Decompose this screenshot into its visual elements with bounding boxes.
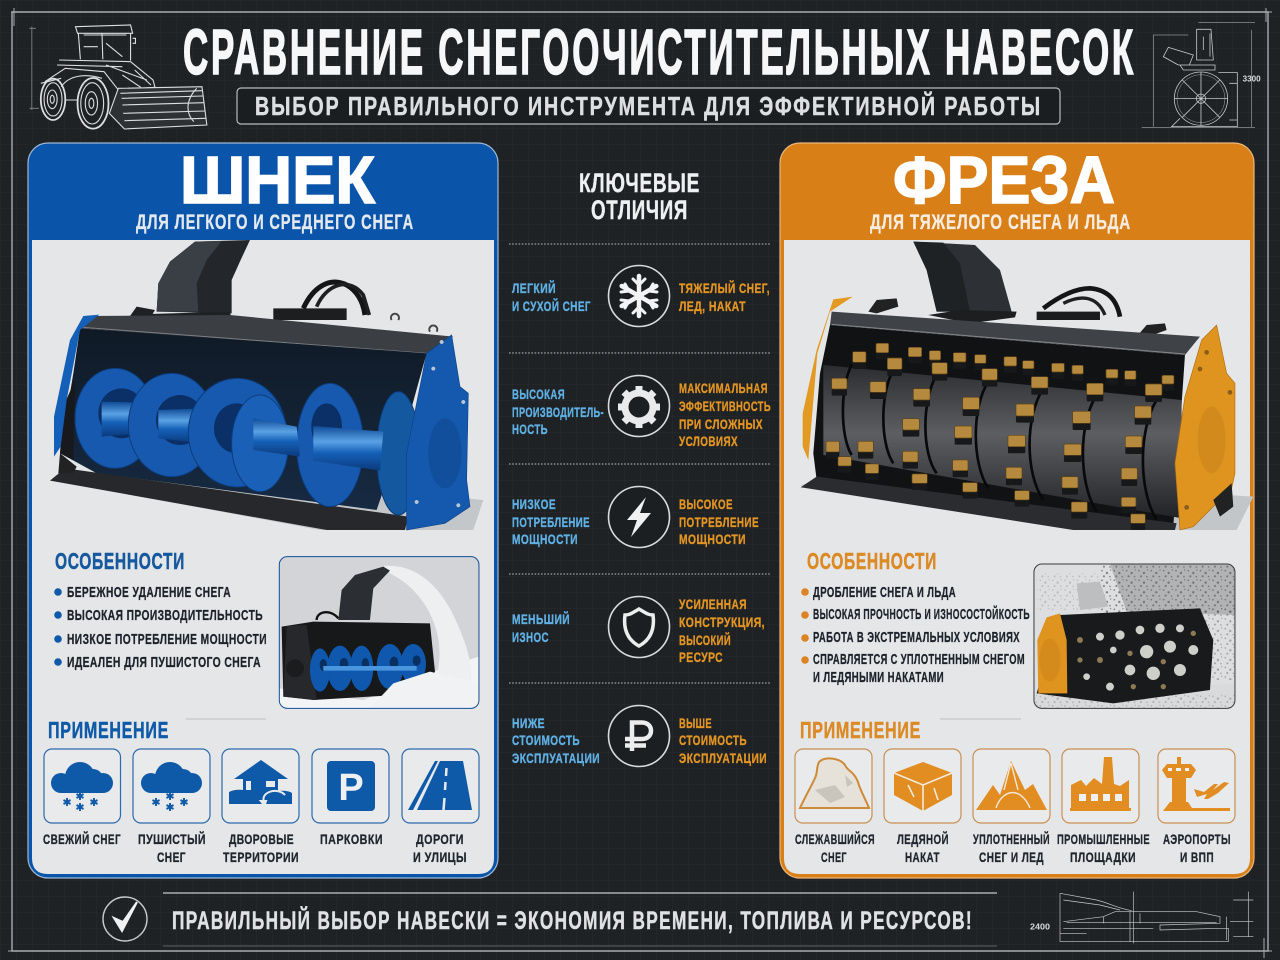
icon: check mark: [103, 897, 147, 941]
row: productivity: ЭФФЕКТИВНОСТЬ: [679, 398, 771, 414]
label: roads: [413, 831, 467, 865]
label: packed snow: [795, 830, 875, 865]
row: productivity: НОСТЬ: [512, 421, 548, 437]
label: ice crust: ЛЕДЯНОЙ: [897, 830, 949, 847]
row: productivity: ПРИ СЛОЖНЫХ: [679, 416, 763, 432]
row: power: ПОТРЕБЛЕНИЕ: [679, 514, 759, 530]
label: airports: [1163, 831, 1231, 865]
row: wear: КОНСТРУКЦИЯ,: [679, 614, 765, 630]
image: mill crushing ice: [1034, 564, 1235, 708]
row: productivity: МАКСИМАЛЬНАЯ: [679, 380, 768, 396]
heading: key differences: ОТЛИЧИЯ: [591, 195, 688, 225]
icon: machine blueprint: 2400: [1030, 921, 1050, 931]
row: snow type: ЛЕГКИЙ: [512, 279, 556, 296]
list: features: СПРАВЛЯЕТСЯ С УПЛОТНЕННЫМ СНЕГОМ: [813, 652, 1025, 668]
icon: snow blower blueprint: 3300: [1243, 74, 1261, 84]
row: productivity: [512, 376, 771, 449]
panel header: фреза: ДЛЯ ТЯЖЕЛОГО СНЕГА И ЛЬДА: [870, 211, 1131, 234]
label: compacted snow: СНЕГ И ЛЕД: [979, 849, 1044, 865]
teeth: [826, 343, 1174, 523]
row: snow type: И СУХОЙ СНЕГ: [512, 297, 591, 314]
label: industrial sites: ПРОМЫШЛЕННЫЕ: [1057, 831, 1150, 847]
icon: compacted snow and ice: [973, 749, 1050, 823]
row: wear: ИЗНОС: [512, 629, 549, 645]
row: power: МОЩНОСТИ: [512, 531, 578, 547]
row: cost: ЭКСПЛУАТАЦИИ: [512, 750, 600, 766]
row: snow type: ТЯЖЕЛЫЙ СНЕГ,: [679, 279, 770, 296]
label: fresh snow: СВЕЖИЙ СНЕГ: [43, 830, 121, 847]
icon: industrial sites: [1062, 749, 1139, 823]
icon: snow blower blueprint: [1142, 23, 1261, 127]
list: features: [801, 585, 1030, 686]
image: auger attachment: [50, 240, 483, 530]
heading: особенности: ОСОБЕННОСТИ: [55, 548, 185, 574]
list: features: [54, 585, 267, 671]
label: fluffy snow: СНЕГ: [157, 849, 186, 865]
label: packed snow: СЛЕЖАВШИЙСЯ: [795, 830, 875, 847]
drum: [823, 365, 1182, 518]
row: power: ПОТРЕБЛЕНИЕ: [512, 514, 590, 530]
row: power: ВЫСОКОЕ: [679, 496, 733, 512]
icon: machine blueprint: [1030, 892, 1253, 943]
label: ice crust: НАКАТ: [905, 849, 940, 865]
icon: yards: [222, 749, 299, 823]
row: snow type: [512, 266, 770, 326]
label: parking: ПАРКОВКИ: [320, 831, 383, 847]
label: yards: ДВОРОВЫЕ: [229, 831, 294, 847]
panel header: шнек: [136, 143, 414, 234]
icon: fluffy snow: [133, 749, 210, 823]
subtitle box: [237, 88, 1060, 124]
row: cost: ВЫШЕ: [679, 715, 712, 731]
list: features: ВЫСОКАЯ ПРОЧНОСТЬ И ИЗНОСОСТОЙКОСТЬ: [813, 605, 1030, 623]
label: fluffy snow: ПУШИСТЫЙ: [138, 830, 206, 847]
heading: применение: ПРИМЕНЕНИЕ: [800, 717, 921, 743]
list: features: ВЫСОКАЯ ПРОИЗВОДИТЕЛЬНОСТЬ: [67, 608, 263, 624]
list: features: НИЗКОЕ ПОТРЕБЛЕНИЕ МОЩНОСТИ: [67, 632, 267, 648]
row: cost: СТОИМОСТЬ: [512, 732, 580, 748]
label: packed snow: СНЕГ: [821, 849, 847, 865]
icon: parking: [312, 749, 389, 823]
row: wear: [512, 596, 765, 665]
label: industrial sites: [1057, 831, 1150, 865]
row: wear: МЕНЬШИЙ: [512, 610, 570, 627]
image: auger throwing snow: [279, 557, 479, 708]
panel: шнек: [28, 143, 498, 878]
row: productivity: ПРОИЗВОДИТЕЛЬ-: [512, 404, 604, 420]
row: power: МОЩНОСТИ: [679, 531, 746, 547]
panel: фреза: [780, 143, 1254, 878]
icon: fresh snow: [44, 749, 120, 823]
panel header: фреза: ФРЕЗА: [893, 143, 1115, 218]
label: airports: АЭРОПОРТЫ: [1163, 831, 1231, 847]
label: roads: И УЛИЦЫ: [413, 849, 467, 865]
row: cost: [512, 706, 767, 766]
row: cost: ЭКСПЛУАТАЦИИ: [679, 750, 767, 766]
row: cost: СТОИМОСТЬ: [679, 732, 747, 748]
icon: airports: [1158, 749, 1235, 823]
icon: parking: P: [338, 767, 364, 809]
heading: key differences: [579, 168, 700, 225]
row: wear: ВЫСОКИЙ: [679, 631, 731, 648]
row: productivity: УСЛОВИЯХ: [679, 433, 738, 449]
row: power: [512, 486, 759, 548]
row: wear: РЕСУРС: [679, 649, 723, 665]
row: snow type: ЛЕД, НАКАТ: [679, 298, 746, 314]
image: milling attachment: [800, 242, 1253, 530]
row: productivity: ВЫСОКАЯ: [512, 386, 565, 402]
icon: ice crust: [884, 749, 961, 823]
icon: loader blueprint: [29, 25, 207, 129]
list: features: БЕРЕЖНОЕ УДАЛЕНИЕ СНЕГА: [67, 585, 231, 601]
panel header: шнек: ДЛЯ ЛЕГКОГО И СРЕДНЕГО СНЕГА: [136, 211, 414, 234]
label: industrial sites: ПЛОЩАДКИ: [1070, 849, 1136, 865]
list: features: ДРОБЛЕНИЕ СНЕГА И ЛЬДА: [813, 585, 956, 601]
heading: особенности: ОСОБЕННОСТИ: [807, 548, 937, 574]
label: yards: ТЕРРИТОРИИ: [223, 849, 299, 865]
list: features: И ЛЕДЯНЫМИ НАКАТАМИ: [813, 670, 944, 686]
row: cost: НИЖЕ: [512, 715, 545, 731]
list: features: ИДЕАЛЕН ДЛЯ ПУШИСТОГО СНЕГА: [67, 655, 261, 671]
tooth stems: [826, 350, 1174, 530]
footer banner: [103, 893, 997, 946]
icon: packed snow: [795, 749, 872, 823]
heading: key differences: КЛЮЧЕВЫЕ: [579, 168, 700, 198]
label: compacted snow: УПЛОТНЕННЫЙ: [973, 830, 1050, 847]
label: roads: ДОРОГИ: [416, 831, 464, 847]
label: fluffy snow: [138, 830, 206, 865]
row: power: НИЗКОЕ: [512, 496, 556, 512]
list: features: РАБОТА В ЭКСТРЕМАЛЬНЫХ УСЛОВИЯХ: [813, 630, 1020, 646]
label: compacted snow: [973, 830, 1050, 865]
row: wear: УСИЛЕННАЯ: [679, 596, 747, 612]
discs: [75, 368, 155, 468]
label: yards: [223, 831, 299, 865]
icon: road: [402, 749, 479, 823]
heading: применение: ПРИМЕНЕНИЕ: [48, 717, 169, 743]
panel header: шнек: ШНЕК: [180, 143, 375, 218]
subtitle box: ВЫБОР ПРАВИЛЬНОГО ИНСТРУМЕНТА ДЛЯ ЭФФЕКТИВНОЙ РАБОТЫ: [255, 91, 1042, 121]
panel: ключевые отличия: [509, 168, 771, 766]
label: airports: И ВПП: [1180, 849, 1214, 865]
label: ice crust: [897, 830, 949, 865]
